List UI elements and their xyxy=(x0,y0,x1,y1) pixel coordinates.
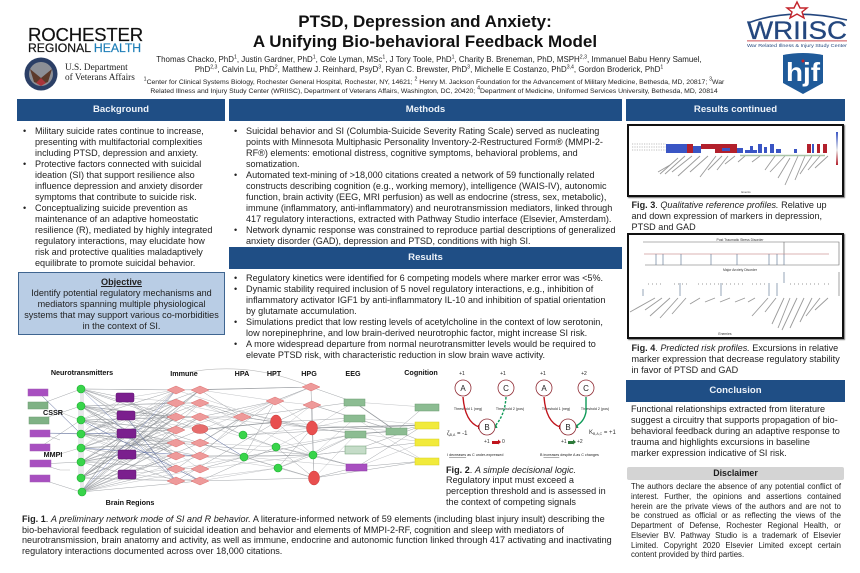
caption: figure 3 xyxy=(632,200,827,232)
chart: decisional logic: +1 xyxy=(484,439,490,445)
heading: Results xyxy=(229,247,622,269)
neurotransmitter nodes xyxy=(77,385,86,496)
text: background bullets: presenting with multifactorial complexities xyxy=(35,137,202,147)
network group labels: MMPI xyxy=(44,450,62,459)
text: results bullets xyxy=(234,273,605,360)
chart: decisional logic: +2 xyxy=(577,439,583,445)
text: background bullets: Military suicide rates continue to increase, xyxy=(35,126,204,136)
caption: figure 4: Fig. 4. Predicted risk profiles. Excursions in relative xyxy=(632,343,838,353)
logo: WRIISC xyxy=(746,0,848,48)
logo: Veterans Affairs text: U.S. Department xyxy=(65,63,128,73)
text: disclaimer: Department of Defense, Rochester Regional Health, or xyxy=(631,521,841,530)
panel: objective xyxy=(18,272,225,335)
chart: figure 3 heatmap xyxy=(627,124,844,197)
chart: decisional logic: Threshold 2 (pos) xyxy=(496,407,524,411)
network group labels: Brain Regions xyxy=(106,498,154,507)
logo: Rochester Regional Health: REGIONAL HEALTH xyxy=(28,41,141,55)
chart: decisional logic: C xyxy=(503,384,509,393)
brain region nodes xyxy=(116,393,136,479)
chart: figure 4 risk profiles: Enemies xyxy=(718,332,732,336)
title xyxy=(253,12,597,50)
authors: Thomas Chacko, PhD1, Justin Gardner, PhD1, Cole Lyman, MSc1, J Tory Toole, PhD1, Charity B. Breneman, PhD, MSPH2,3, Immanuel Babu Henry Samuel, xyxy=(156,54,702,64)
text: methods bullets: constructs describing cognition (e.g., working memory), intelligence (WAIS-IV), autonomic xyxy=(246,181,607,191)
caption: figure 3: and down expression of markers in depression, xyxy=(632,211,822,221)
panel: objective: mediators spanning multiple physiological xyxy=(38,299,205,309)
caption: figure 1: bio-behavioral feedback regulation of suicidal ideation and behavior and elements of MMPI-2-RF, cognition and sleep with mediators of xyxy=(22,525,564,535)
text: background bullets: equilibrate to promote suicidal behavior. xyxy=(35,258,195,268)
text: results bullets: Dynamic stability required inclusion of 5 novel regulatory interactions, e.g., inhibition of xyxy=(246,284,593,294)
chart: decisional logic: +2 xyxy=(581,371,587,377)
panel: objective: systems that may support various co-morbidities xyxy=(24,310,219,320)
chart: figure 4 risk profiles: Post Traumatic Stress Disorder xyxy=(717,238,764,242)
text: methods bullets: points with Minnesota Multiphasic Personality Inventory-2-Restructured Form® (MMPI-2- xyxy=(246,137,603,147)
chart: decisional logic: = -1 xyxy=(455,431,468,437)
text: results bullets: A more widespread departure from normal neurotransmitter levels would be required to xyxy=(246,339,596,349)
caption: figure 2: the context of competing signals xyxy=(446,497,576,507)
logo: WRIISC: WRIISC xyxy=(747,17,847,45)
caption: figure 3: PTSD and GAD xyxy=(632,222,696,232)
text: disclaimer xyxy=(631,482,842,559)
caption: figure 1: Fig. 1. A preliminary network mode of SI and R behavior. A literature-informed network of 59 elements (including blast injury insult) describing the xyxy=(22,514,605,524)
network group labels: Cognition xyxy=(404,368,438,377)
immune nodes xyxy=(167,386,209,485)
text: methods bullets: Automated text-mining of >18,000 citations created a network of 59 functionally related xyxy=(246,170,595,180)
chart: decisional logic: +1 xyxy=(561,439,567,445)
network group labels: HPG xyxy=(301,369,317,378)
affiliations: Related Illness and Injury Study Center (WRIISC), Department of Veterans Affairs, Washington, DC, 20420; 4Department of Medicine, Uniformed Services University, Bethesda, MD, 20814 xyxy=(150,85,718,94)
caption: figure 2: perception threshold and is assessed in xyxy=(446,486,606,496)
text: background bullets: Protective factors connected with suicidal xyxy=(35,159,201,169)
panel: objective: Objective xyxy=(101,277,142,287)
chart: decisional logic: B,A,C xyxy=(593,432,603,436)
chart: decisional logic: +1 xyxy=(540,371,546,377)
logo: Rochester Regional Health xyxy=(28,24,143,55)
text: results bullets: Regulatory kinetics were identified for 6 competing models where marker error was <5%. xyxy=(246,273,603,283)
chart: decisional logic: B increases despite A as C changes xyxy=(540,453,599,457)
chart: decisional logic: 0 xyxy=(502,439,505,445)
text: background bullets: symptoms that contribute to suicide risk. xyxy=(35,192,197,202)
text: background bullets: including PTSD, depression and anxiety. xyxy=(35,148,198,158)
text: results bullets: inflammatory activator IGF1 by anti-inflammatory IL-10 and inhibition of spatial orientation xyxy=(246,295,605,305)
chart: decisional logic: Threshold 1 (neg) xyxy=(542,407,570,411)
network group labels: Immune xyxy=(170,369,198,378)
text: disclaimer: The authors declare the absence of any potential conflict of xyxy=(631,482,841,491)
chart: decisional logic: A xyxy=(541,384,547,393)
text: methods bullets: RF®) elements: emotional distress, cognitive symptoms, behavioral problems, and xyxy=(246,148,578,158)
text: methods bullets xyxy=(234,126,616,246)
heading: Background: Background xyxy=(93,104,149,115)
caption: figure 1 xyxy=(22,514,612,556)
endocrine nodes xyxy=(233,383,321,421)
chart: decisional logic: B,A xyxy=(450,433,456,437)
text: background bullets: Conceptualizing suicide prevention as xyxy=(35,203,188,213)
chart: decisional logic: +1 xyxy=(500,371,506,377)
text: disclaimer: herein are the private views of the authors and are not to xyxy=(631,502,841,511)
text: results bullets: low norepinephrine, and low brain-derived neurotrophic factor, might increase SI risk. xyxy=(246,328,587,338)
logo: Veterans Affairs text xyxy=(65,63,135,83)
text: conclusion: marker expression indicative of SI risk. xyxy=(631,448,787,458)
chart: decisional logic: Threshold 2 (pos) xyxy=(581,407,609,411)
text: disclaimer: Elsevier BV. Pathway Studio is a trademark of Elsevier xyxy=(631,531,841,540)
network group labels: HPT xyxy=(267,369,282,378)
chart: decisional logic: I decreases as C under-expressed xyxy=(447,453,503,457)
heading: Conclusion xyxy=(626,380,845,402)
text: background bullets xyxy=(23,126,212,268)
text: background bullets: ideation (SI) that support resilience also xyxy=(35,170,195,180)
text: disclaimer: content provided by third parties. xyxy=(631,550,744,559)
chart: decisional logic: K xyxy=(589,430,593,436)
caption: figure 4 xyxy=(632,343,840,375)
logo: Veterans Affairs seal xyxy=(24,58,58,90)
caption: figure 3: Fig. 3. Qualitative reference profiles. Relative up xyxy=(632,200,827,210)
text: background bullets: maintenance of an adaptive homeostatic xyxy=(35,214,198,224)
chart: decisional logic: ζ xyxy=(447,431,450,437)
authors: PhD2,3, Calvin Lu, PhD2, Matthew J. Reinhard, PsyD3, Ryan C. Brewster, PhD3, Michelle E Costanzo, PhD3,4, Gordon Broderick, PhD1 xyxy=(195,64,663,74)
text: background bullets: risk and protective qualities maladaptively xyxy=(35,247,203,257)
chart: figure 3 heatmap: Events xyxy=(741,190,751,194)
logo: Veterans Affairs text: of Veterans Affairs xyxy=(65,73,135,83)
caption: figure 4: marker expression that decrease regulatory stability xyxy=(632,354,840,364)
panel: objective: in the context of SI. xyxy=(83,321,160,331)
text: methods bullets: function, brain activity (EEG, MRI perfusion) as well as endocrine (stress, sex, metabolic), xyxy=(246,192,606,202)
chart: figure 4 risk profiles xyxy=(627,233,844,339)
caption: figure 2: Regulatory input must exceed a xyxy=(446,475,574,485)
network group labels xyxy=(43,368,438,507)
chart: decisional logic: = +1 xyxy=(602,430,617,436)
heading: Methods xyxy=(229,99,622,121)
heading: Conclusion: Conclusion xyxy=(709,385,762,396)
EEG and cognition nodes xyxy=(344,399,439,471)
logo: hjf: hjf xyxy=(786,57,820,87)
network group labels: EEG xyxy=(345,369,361,378)
text: conclusion: behavioral feedback during an adaptive response to xyxy=(631,426,840,436)
logo: hjf xyxy=(783,53,823,94)
text: methods bullets: immune (inflammatory, anti-inflammatory) and neurotransmission mediators, linked through xyxy=(246,203,612,213)
network group labels: Neurotransmitters xyxy=(51,368,113,377)
chart: figure 4 risk profiles: Major Anxiety Disorder xyxy=(723,268,758,272)
heading: Disclaimer: Disclaimer xyxy=(713,468,758,478)
chart: network model xyxy=(28,368,440,507)
text: methods bullets: 417 regulatory interactions, extracted with Pathway Studio interface (Elsevier, Amsterdam). xyxy=(246,214,611,224)
network group labels: HPA xyxy=(235,369,249,378)
heading: Results: Results xyxy=(408,252,443,263)
title: PTSD, Depression and Anxiety: xyxy=(298,12,552,30)
text: results bullets: by glutamate accumulation. xyxy=(246,306,357,316)
chart: decisional logic: Threshold 1 (neg) xyxy=(454,407,482,411)
caption: figure 4: in favor of PTSD and GAD xyxy=(632,365,738,375)
affiliations: 1Center for Clinical Systems Biology, Rochester General Hospital, Rochester, NY, 14621; 2 Henry M. Jackson Foundation for the Advancement of Military Medicine, Bethesda, MD, 20817; 3War xyxy=(144,76,724,86)
network group labels: CSSR xyxy=(43,408,64,417)
caption: figure 1: regulatory interactions documented across over 18,000 citations. xyxy=(22,546,282,556)
affiliations xyxy=(144,76,724,94)
CSSR and MMPI rectangles xyxy=(28,389,51,482)
heading: Methods: Methods xyxy=(406,104,445,115)
chart: decisional logic xyxy=(447,371,617,458)
title: A Unifying Bio-behavioral Feedback Model xyxy=(253,32,597,50)
text: methods bullets: Network dynamic response was constrained to reproduce partial descriptions of generalized xyxy=(246,225,616,235)
logo: WRIISC: War Related Illness & Injury Study Center xyxy=(747,43,848,48)
chart: decisional logic: +1 xyxy=(459,371,465,377)
text: results bullets: elevate PTSD risk, with characteristic reduction in slow brain wave activity. xyxy=(246,350,545,360)
chart: decisional logic: A xyxy=(460,384,466,393)
text: background bullets: resilience (R), mediated by highly integrated xyxy=(35,225,212,235)
heading: Disclaimer xyxy=(627,467,844,480)
panel: objective: Identify potential regulatory mechanisms and xyxy=(31,288,212,298)
authors xyxy=(156,54,702,74)
heading: Results continued xyxy=(626,99,845,121)
text: results bullets: Simulations predict that low resting levels of acetylcholine in the context of low serotonin, xyxy=(246,317,603,327)
caption: figure 1: neurotransmission, brain anatomy and activity, as well as immune, endocrine and autonomic function linked through 417 activating and inactivating xyxy=(22,535,612,545)
chart: decisional logic: B xyxy=(565,423,571,432)
caption: figure 2: Fig. 2. A simple decisional logic. xyxy=(446,464,576,474)
chart: decisional logic: C xyxy=(583,384,589,393)
text: background bullets: influence depression and anxiety disorder xyxy=(35,181,203,191)
text: conclusion: Functional relationships extracted from literature xyxy=(631,404,825,414)
text: disclaimer: interest. Further, the opinions and assertions contained xyxy=(631,492,841,501)
text: methods bullets: anxiety disorder (GAD), depression and PTSD, conditions with high SI. xyxy=(246,236,531,246)
caption: figure 2 xyxy=(446,464,606,507)
heading: Results continued: Results continued xyxy=(694,104,777,115)
text: conclusion: trauma and highlights excursions in baseline xyxy=(631,437,810,447)
text: disclaimer: be construed as official or as reflecting the views of the xyxy=(631,511,841,520)
text: methods bullets: Suicidal behavior and SI (Columbia-Suicide Severity Rating Scale) served as nucleating xyxy=(246,126,599,136)
chart: decisional logic: B xyxy=(484,423,490,432)
text: conclusion: suggest a circuitry that supports propagation of bio- xyxy=(631,415,838,425)
text: background bullets: regulatory interactions, may elucidate how xyxy=(35,236,205,246)
text: disclaimer: Limited. Copyright 2020 Elsevier Limited except certain xyxy=(631,541,841,550)
text: conclusion xyxy=(631,404,840,458)
logo: Rochester Regional Health: ROCHESTER xyxy=(28,24,143,45)
heading: Background xyxy=(17,99,225,121)
text: methods bullets: somatization. xyxy=(246,159,300,169)
